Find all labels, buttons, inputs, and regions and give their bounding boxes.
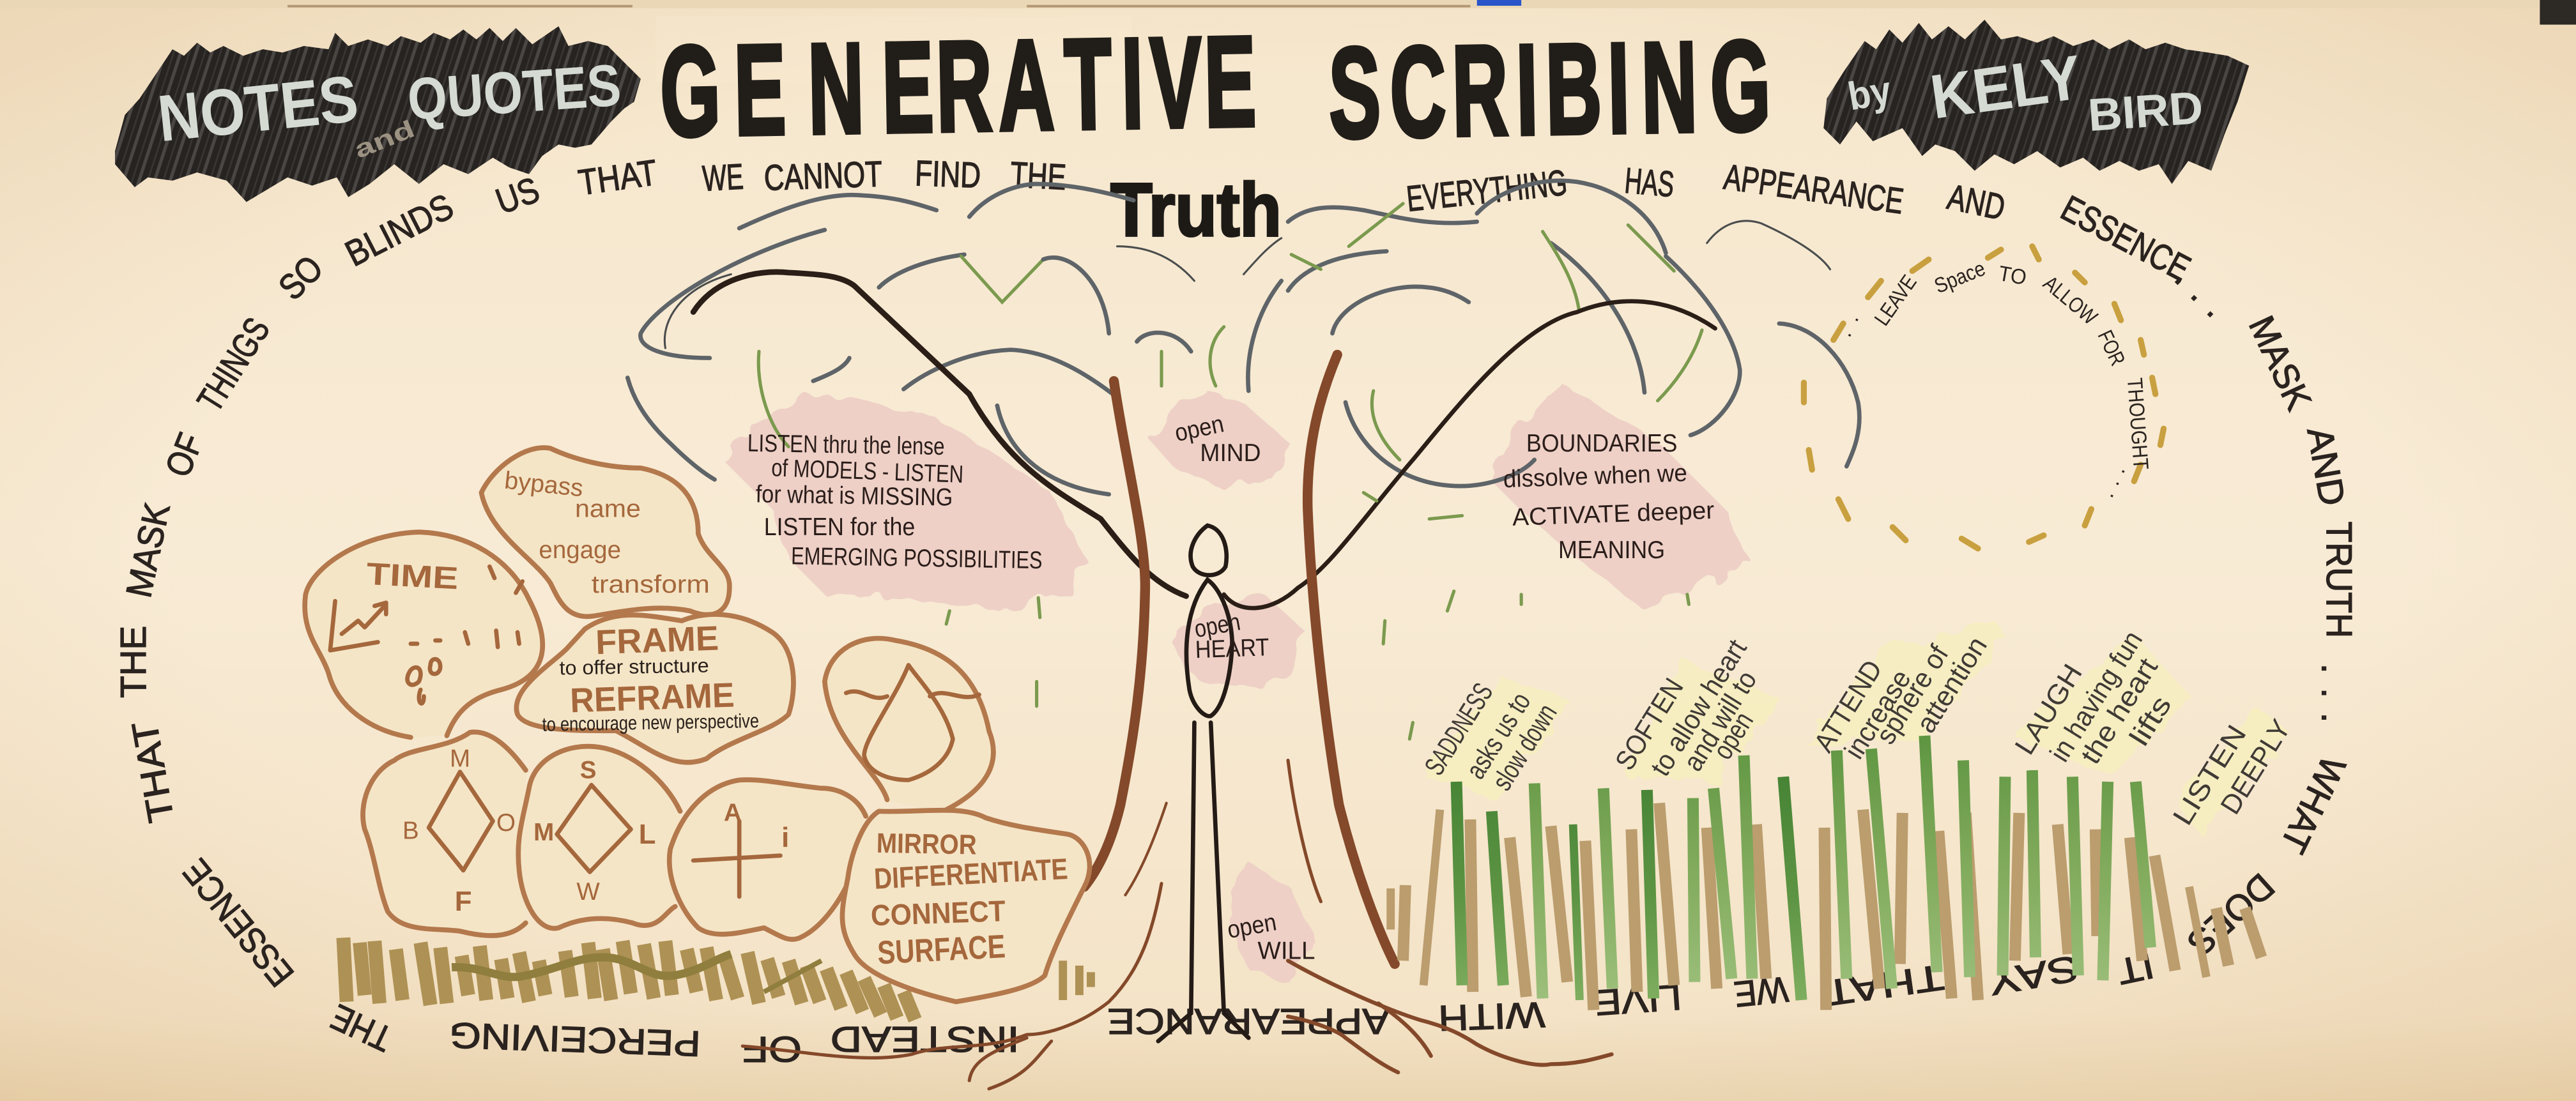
circular quote text around the page: THINGS [189, 311, 277, 418]
boundaries text [1503, 430, 1715, 564]
circular quote text around the page: WHAT [2273, 750, 2354, 859]
circular quote text around the page: ... [2168, 257, 2235, 324]
circular quote text around the page: INSTEAD [831, 1019, 1020, 1059]
cloud: M B O F diamond: F [455, 886, 471, 917]
open will label: WILL [1257, 937, 1315, 964]
listen through models text [747, 430, 1043, 574]
label: saddness: asks us to [1460, 687, 1537, 784]
yellow highlight patches [1423, 621, 2290, 834]
leave space to allow for thought text: ALLOW [2039, 271, 2102, 330]
boundaries text: dissolve when we [1503, 459, 1688, 493]
cloud: S M L W diamond: W [576, 878, 600, 906]
label: laugh [2009, 625, 2178, 770]
listen through models text: for what is MISSING [756, 480, 953, 512]
circular quote text around the page: AND [2299, 424, 2353, 509]
open heart label: HEART [1195, 634, 1269, 664]
circular quote text around the page: MASK [118, 499, 178, 601]
circular quote text around the page: THAT [1822, 957, 1947, 1014]
circular quote text around the page: FIND [914, 153, 981, 195]
circular quote text around the page: TRUTH [2319, 521, 2359, 638]
circular quote text around the page: EVERYTHING [1405, 162, 1569, 219]
label: laugh: lifts [2123, 690, 2178, 752]
cloud: mirror differentiate connect surface: CONNECT [870, 894, 1006, 932]
open mind label [1172, 410, 1261, 467]
circular quote text around the page: PERCEIVING [448, 1015, 702, 1064]
label: listen deeply: DEEPLY [2214, 714, 2297, 820]
label: soften: open [1707, 706, 1759, 765]
cloud: drop [825, 639, 993, 813]
leave space to allow for thought text: FOR [2093, 327, 2129, 370]
cloud: S M L W diamond: L [639, 819, 656, 850]
banner: by kelvy bird [1823, 20, 2249, 184]
circular quote text around the page: THE [1009, 154, 1067, 197]
label: laugh: LAUGH [2009, 658, 2089, 760]
cloud: frame and reframe: FRAME [595, 619, 719, 662]
circular quote text around the page: WITH [1438, 994, 1545, 1038]
leave space to allow for thought text: ... [2105, 466, 2140, 506]
open will label [1225, 908, 1315, 964]
cloud: bypass name engage transform: name [575, 496, 641, 523]
infinity line through the figure [693, 272, 1715, 608]
cloud: S M L W diamond: M [533, 819, 554, 846]
label: saddness: slow down [1486, 699, 1563, 796]
leave space to allow for thought text: TO [1997, 262, 2028, 290]
cloud: frame and reframe [516, 614, 793, 763]
label: soften: SOFTEN [1609, 672, 1690, 776]
circular quote text around the page: SAY [1986, 948, 2082, 1003]
circular quote text around the page: AND [1944, 176, 2009, 227]
circular quote text around the page: WE [1732, 969, 1790, 1015]
circular quote text around the page: IT [2114, 945, 2158, 992]
label: listen deeply: LISTEN [2166, 720, 2253, 831]
listen through models text: EMERGING POSSIBILITIES [791, 542, 1043, 574]
circular quote text around the page: MASK [2241, 310, 2319, 416]
circular quote text around the page: BLINDS [339, 186, 459, 274]
cloud: frame and reframe: to encourage new perspective [542, 710, 759, 736]
label: listen deeply [2166, 714, 2297, 831]
cloud: M B O F diamond [363, 732, 526, 936]
tree crown strokes [627, 181, 1859, 494]
cloud: M B O F diamond: O [496, 809, 516, 837]
cloud: mirror differentiate connect surface: SURFACE [877, 927, 1006, 971]
cloud: bypass name engage transform: engage [539, 536, 621, 564]
heading: truth: Truth [1110, 168, 1282, 252]
circular quote text around the page: HAS [1623, 160, 1676, 204]
open mind label: MIND [1200, 439, 1261, 467]
label: saddness: SADDNESS [1418, 678, 1499, 780]
stray green leaves [946, 492, 1689, 739]
circular quote text around the page: US [491, 169, 544, 222]
boundaries text: MEANING [1558, 536, 1665, 564]
olive ground hatching [343, 938, 1091, 1020]
label: soften: to allow heart [1644, 634, 1753, 782]
banner: notes and quotes: and [350, 115, 418, 164]
pink crayon patches [723, 383, 1748, 982]
open mind label: open [1172, 410, 1226, 447]
label: attend: attention [1910, 631, 1993, 738]
dashed thought circle [1804, 247, 2164, 549]
circular quote text around the page: THAT [124, 718, 181, 826]
cloud: mirror differentiate connect surface: MIRROR [876, 828, 977, 861]
label: attend [1808, 631, 1993, 764]
open heart label [1192, 608, 1269, 664]
circular quote text around the page: DOES [2180, 866, 2282, 964]
tree trunk and roots [742, 354, 1612, 1089]
leave space to allow for thought text: Space [1931, 257, 1989, 298]
leave space to allow for thought text: .. [1832, 310, 1864, 340]
banner: notes and quotes: NOTES [155, 61, 362, 155]
cloud: M B O F diamond: B [402, 817, 419, 845]
grass: tan blades [1391, 803, 2262, 1010]
circular quote text around the page: ESSENCE [175, 851, 302, 994]
open will label: open [1225, 908, 1278, 944]
cloud: mirror differentiate connect surface [842, 810, 1090, 1002]
circular quote text around the page: ... [2315, 664, 2354, 722]
label: laugh: in having fun [2044, 625, 2149, 767]
cloud: M B O F diamond: M [450, 745, 470, 773]
cloud: S M L W diamond: S [580, 757, 596, 784]
label: attend: sphere of [1870, 639, 1955, 750]
cloud: bypass name engage transform: bypass [503, 467, 585, 502]
circular quote text around the page: APPEARANCE [1721, 156, 1906, 222]
title: generative scribing: GENERATIVE [659, 10, 1257, 163]
stick figure [1158, 526, 1248, 1041]
cloud: mirror differentiate connect surface: DIFFERENTIATE [873, 852, 1069, 895]
circular quote text around the page: OF [157, 427, 211, 482]
cloud: time [305, 532, 542, 738]
label: attend: ATTEND [1808, 655, 1889, 757]
label: saddness [1418, 678, 1563, 796]
boundaries text: BOUNDARIES [1526, 430, 1677, 457]
cloud: a i cross: A [724, 799, 742, 826]
circular quote text around the page: APPEARANCE [1107, 1001, 1390, 1042]
title: generative scribing [659, 10, 1772, 165]
open heart label: open [1192, 608, 1243, 643]
banner: by kelvy bird: by [1844, 68, 1894, 119]
cloud: bypass name engage transform [481, 448, 730, 616]
cloud: a i cross [670, 780, 866, 939]
boundaries text: ACTIVATE deeper [1512, 497, 1715, 531]
leave space to allow for thought text: THOUGHT [2122, 377, 2152, 471]
title: generative scribing: SCRIBING [1328, 14, 1772, 165]
banner: by kelvy bird: KELY [1926, 42, 2085, 132]
circular quote text around the page: ESSENCE [2055, 188, 2197, 289]
cloud: frame and reframe: REFRAME [569, 676, 735, 720]
label: laugh: the heart [2074, 653, 2164, 770]
label: soften: and will to [1677, 665, 1763, 777]
banner: by kelvy bird: BIRD [2087, 82, 2205, 141]
circular quote text around the page: THE [113, 626, 153, 698]
circular quote text around the page: LIVE [1593, 977, 1683, 1023]
banner: notes and quotes: QUOTES [405, 51, 623, 133]
circular quote text around the page [113, 152, 2359, 1070]
leave space to allow for thought text: LEAVE [1870, 271, 1922, 330]
banner: notes and quotes [115, 26, 641, 202]
circular quote text around the page: WE [702, 156, 744, 199]
cloud: a i cross: i [781, 822, 789, 853]
listen through models text: LISTEN thru the lense [747, 430, 945, 460]
circular quote text around the page: OF [742, 1029, 802, 1070]
leave space to allow for thought text [1832, 257, 2152, 506]
circular quote text around the page: SO [271, 248, 330, 307]
circular quote text around the page: CANNOT [763, 153, 883, 198]
cloud: frame and reframe: to offer structure [559, 654, 709, 680]
listen through models text: of MODELS - LISTEN [771, 454, 964, 489]
grass: green blades [1457, 736, 2150, 1000]
cloud: time: TIME [365, 557, 459, 596]
circular quote text around the page: THAT [576, 152, 659, 202]
label: attend: increase [1838, 664, 1917, 764]
cloud: S M L W diamond [518, 747, 680, 929]
listen through models text: LISTEN for the [764, 513, 915, 541]
cloud: bypass name engage transform: transform [592, 571, 710, 598]
circular quote text around the page: THE [325, 997, 398, 1059]
